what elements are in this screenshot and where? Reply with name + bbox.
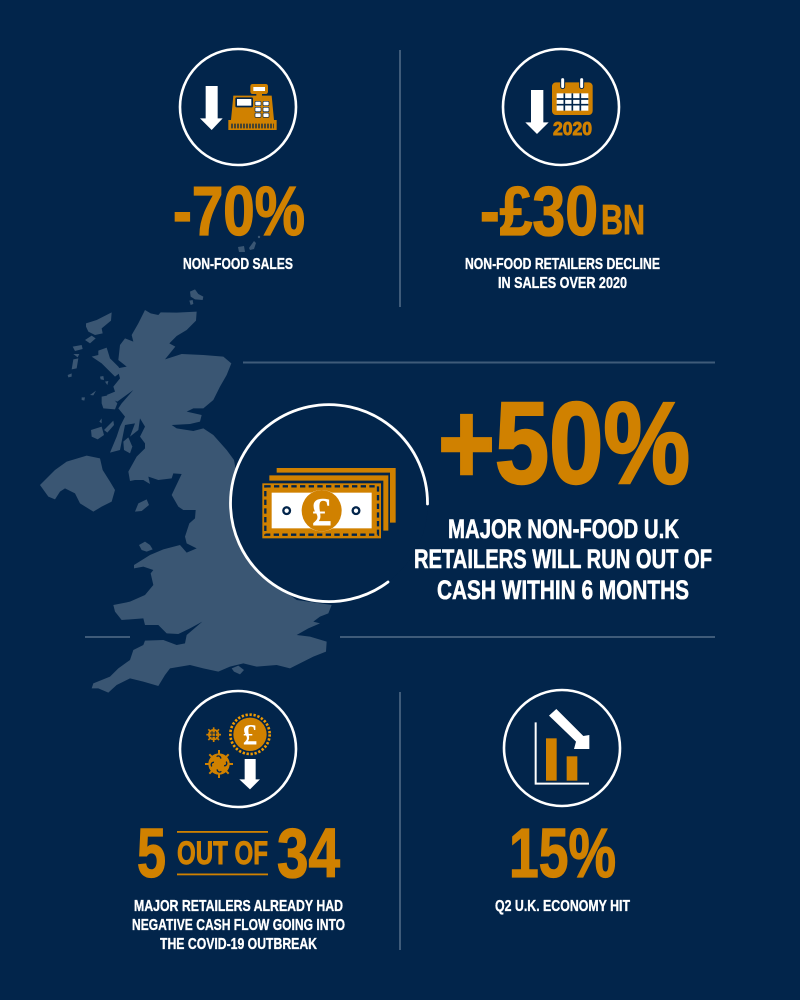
map: United Kingdom silhouette bbox=[40, 236, 332, 693]
panel: +50% run out of cash bbox=[230, 378, 712, 605]
panel: sales decline over 2020 bbox=[465, 49, 660, 292]
caption: non-food sales: NON-FOOD SALES bbox=[183, 256, 293, 273]
caption: retailers decline: IN SALES OVER 2020 bbox=[498, 275, 627, 292]
statistic: -£30BN: BN bbox=[601, 196, 645, 243]
statistic: 5 out of 34: OUT OF bbox=[177, 835, 268, 871]
statistic: 5 out of 34 bbox=[137, 814, 340, 892]
icon: cash register with down arrow bbox=[180, 49, 296, 165]
icon: banknotes in open ring bbox=[230, 404, 428, 602]
statistic: 15%: 15% bbox=[509, 814, 616, 892]
icon: falling bar chart bbox=[504, 690, 620, 806]
panel: non-food sales bbox=[173, 49, 305, 273]
caption: negative cash flow: THE COVID-19 OUTBREAK bbox=[160, 936, 317, 953]
icon: coin, virus and down arrow bbox=[180, 691, 296, 807]
statistic: +50%: +50% bbox=[438, 378, 690, 508]
caption: major retailers run out of cash: CASH WITHIN 6 MONTHS bbox=[437, 575, 689, 605]
caption: retailers decline: NON-FOOD RETAILERS DECLINE bbox=[465, 256, 660, 273]
statistic: -70%: -70% bbox=[173, 172, 305, 250]
caption: major retailers run out of cash: MAJOR NON-FOOD U.K bbox=[448, 514, 679, 544]
caption: Q2 U.K. economy hit: Q2 U.K. ECONOMY HIT bbox=[495, 898, 630, 915]
icon: calendar 2020 with down arrow: 2020 bbox=[553, 119, 592, 139]
caption: major retailers run out of cash bbox=[414, 514, 712, 605]
caption: retailers decline bbox=[465, 256, 660, 292]
icon: calendar 2020 with down arrow bbox=[503, 49, 619, 165]
caption: negative cash flow: MAJOR RETAILERS ALREADY HAD bbox=[134, 898, 343, 915]
panel: 5 out of 34 bbox=[132, 691, 345, 953]
statistic: 5 out of 34: 34 bbox=[277, 814, 340, 892]
statistic: -£30BN: -£30 bbox=[480, 172, 598, 250]
caption: negative cash flow bbox=[132, 898, 345, 953]
caption: negative cash flow: NEGATIVE CASH FLOW GOING INTO bbox=[132, 917, 345, 934]
icon: coin, virus and down arrow: £ bbox=[243, 719, 257, 751]
icon: banknotes in open ring: £ bbox=[312, 489, 332, 534]
panel: Q2 economy hit bbox=[495, 690, 630, 915]
statistic: 5 out of 34: 5 bbox=[137, 814, 166, 892]
